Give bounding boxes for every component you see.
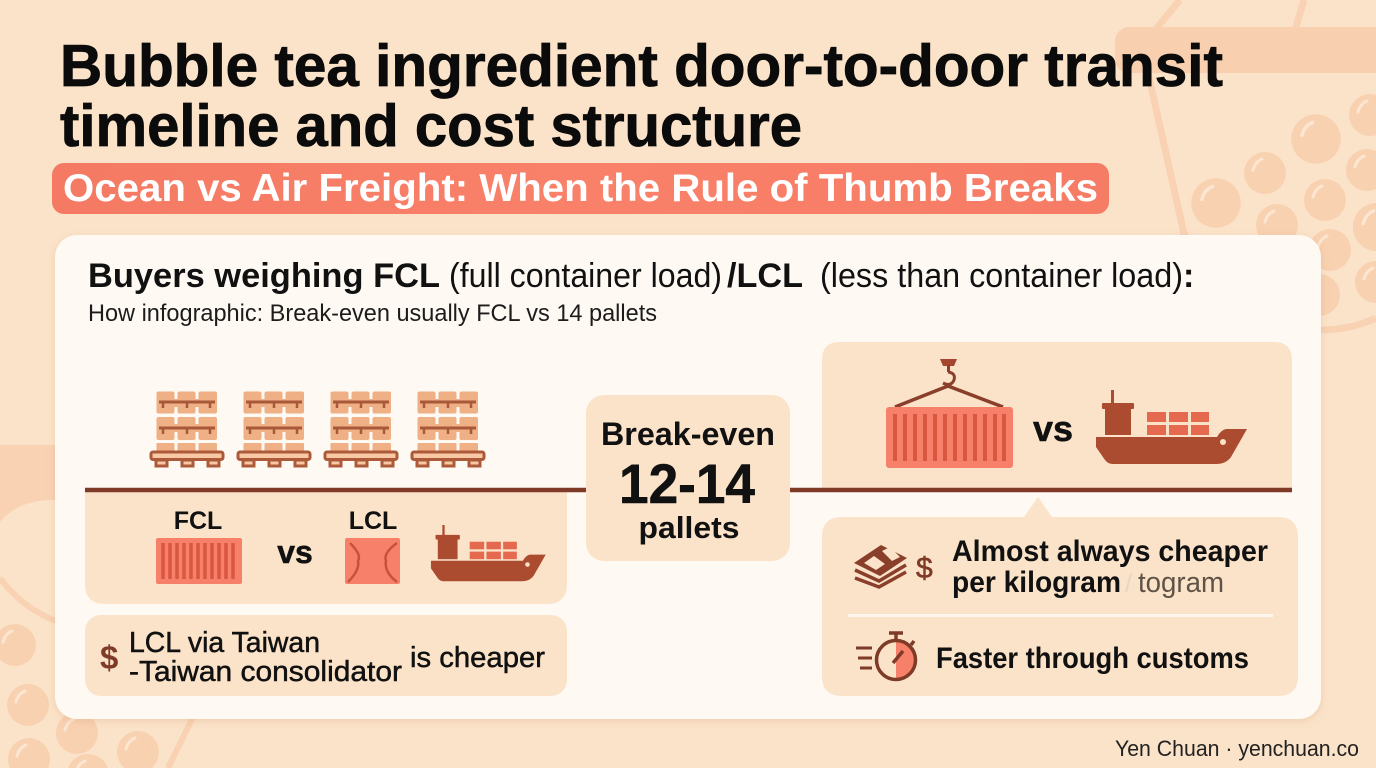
icon: stopwatch (856, 633, 916, 680)
break-even callout: pallets (638, 510, 740, 545)
text: almost always cheaper: Almost always cheaper (952, 535, 1268, 568)
subtitle banner: Ocean vs Air Freight: When the Rule of Thumb Breaks (63, 167, 1098, 210)
card heading: (less than container load) (820, 257, 1183, 295)
title: Bubble tea ingredient door-to-door transit (60, 33, 1223, 99)
icon: container on crane (886, 359, 1013, 468)
card heading: : (1183, 257, 1194, 295)
text: almost always cheaper: per kilogram (952, 566, 1121, 599)
label: vs left: vs (277, 534, 313, 570)
icon: LCL box (345, 538, 400, 584)
text: almost always cheaper: togram (1138, 567, 1224, 599)
icon: money stack (854, 545, 907, 587)
panel: right benefits background (822, 497, 1298, 696)
timeline divider (85, 488, 1292, 492)
main card (55, 235, 1321, 719)
break-even callout (586, 395, 790, 561)
text: LCL via Taiwan consolidator: LCL via Taiwan (129, 627, 320, 659)
card heading: /LCL (727, 257, 803, 295)
footer credit: Yen Chuan · yenchuan.co (1115, 736, 1359, 761)
card heading (88, 257, 1194, 295)
label: vs right: vs (1033, 408, 1073, 449)
title: timeline and cost structure (60, 93, 802, 159)
break-even callout: 12-14 (619, 452, 755, 515)
panel: LCL via Taiwan background (85, 615, 567, 696)
text: LCL via Taiwan consolidator: -Taiwan consolidator (129, 656, 402, 688)
card subheading: How infographic: Break-even usually FCL vs 14 pallets (88, 300, 657, 327)
text: faster through customs: Faster through customs (936, 642, 1249, 675)
break-even callout: Break-even (601, 416, 775, 452)
text: almost always cheaper: / (1125, 568, 1133, 598)
icon: ship right (1096, 390, 1247, 464)
label: FCL: FCL (174, 507, 222, 535)
icon: dollar left: $ (100, 639, 118, 676)
divider (848, 614, 1273, 617)
panel: FCL vs LCL comparison background (85, 490, 567, 604)
panel: right top background (822, 342, 1292, 490)
icon: four pallets (151, 392, 484, 466)
icon: FCL container (156, 538, 242, 584)
card heading: Buyers weighing FCL (88, 257, 440, 295)
icon: ship left (431, 525, 546, 581)
label: LCL: LCL (349, 507, 397, 535)
text: LCL via Taiwan consolidator (129, 627, 545, 688)
title (60, 33, 1223, 159)
text: almost always cheaper (952, 535, 1268, 599)
text: LCL via Taiwan consolidator: is cheaper (410, 642, 545, 674)
card heading: (full container load) (449, 257, 722, 295)
background: bubble tea cup bottom left (0, 445, 194, 768)
icon: dollar right: $ (916, 552, 933, 585)
background: bubble tea cup top right (1115, 0, 1376, 330)
